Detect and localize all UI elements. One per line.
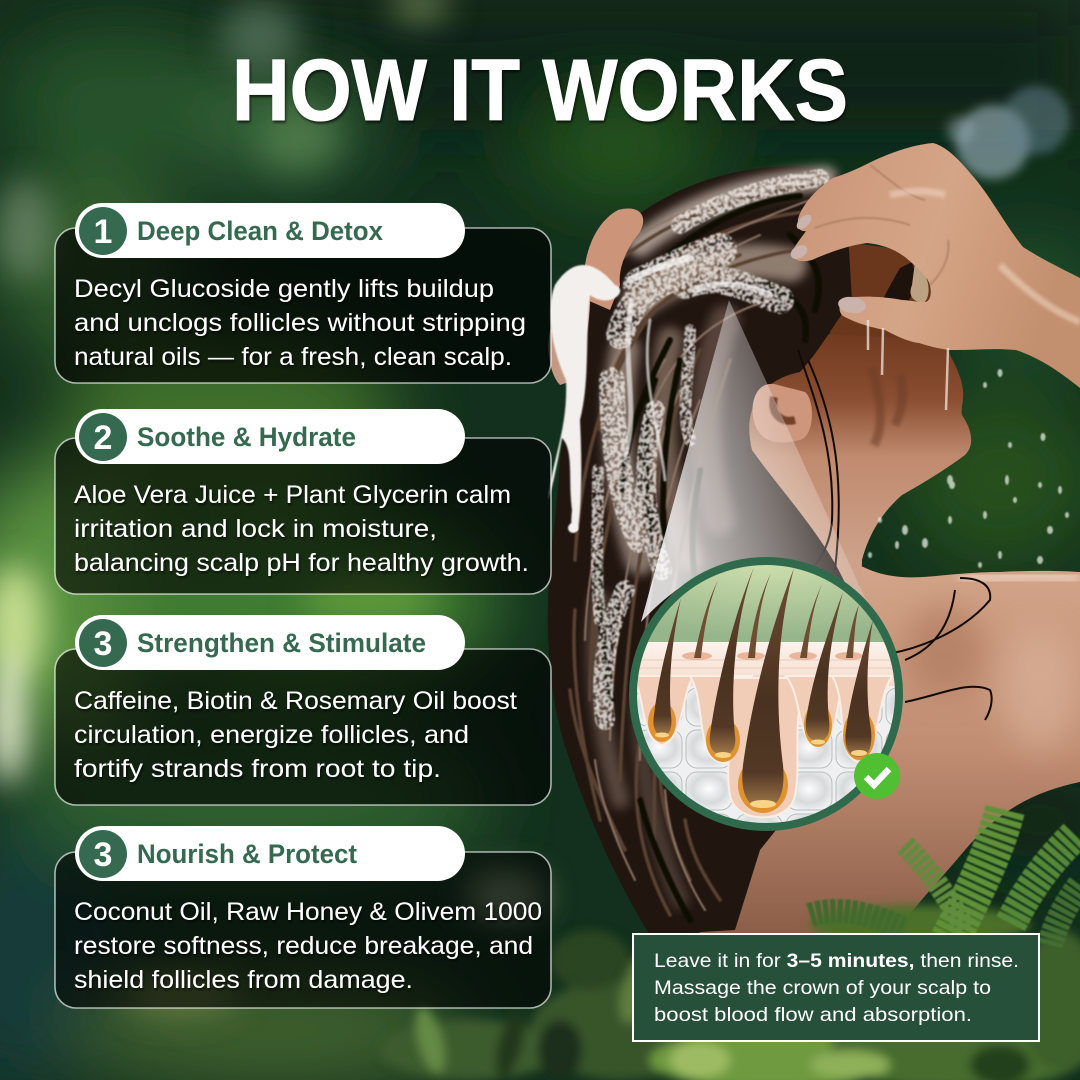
face and neck <box>740 330 971 640</box>
text: step 3 body: circulation, energize follicles, and <box>74 721 469 749</box>
small hairs <box>694 573 859 658</box>
lighter wet hair tones <box>596 178 825 900</box>
callout: usage instructions: Leave it in for 3–5 minutes, then rinse. <box>654 950 1019 972</box>
bokeh lights <box>946 86 1070 179</box>
bulb highlights <box>655 732 867 808</box>
right hand and arm <box>788 143 1080 410</box>
water droplets <box>868 369 1069 568</box>
heading: step 2: Soothe & Hydrate <box>137 422 356 452</box>
text: step 1 body: Decyl Glucoside gently lifts buildup <box>74 275 494 303</box>
text: step 2 body <box>74 481 529 577</box>
neck shadows <box>872 368 902 445</box>
text: step 1 body: natural oils — for a fresh, clean scalp. <box>74 343 512 371</box>
ferns <box>810 810 1080 945</box>
text: step 4 body: shield follicles from damage. <box>74 966 413 994</box>
callout: usage instructions: Massage the crown of your scalp to <box>654 977 991 999</box>
panel: step 2 soothe: 2 <box>94 419 112 457</box>
text: step 2 body: balancing scalp pH for healthy growth. <box>74 549 529 577</box>
photo: woman washing hair <box>380 143 1080 1080</box>
text: step 2 body: irritation and lock in moisture, <box>74 515 437 543</box>
foam <box>597 178 820 720</box>
ear <box>753 384 812 443</box>
panel: step 4 nourish: 3 <box>94 836 112 874</box>
text: step 3 body: fortify strands from root to tip. <box>74 755 441 783</box>
wet strands by the ear <box>790 350 992 720</box>
text: step 4 body: restore softness, reduce breakage, and <box>74 932 533 960</box>
panel: step 2 soothe <box>55 409 551 594</box>
magnifier cone <box>641 300 866 622</box>
gold bulbs <box>648 702 875 813</box>
callout: usage instructions <box>633 934 1039 1041</box>
panel: step 1 deep clean <box>55 203 551 383</box>
panel: step 1 deep clean: 1 <box>94 213 112 251</box>
shoulder and back <box>690 560 1080 940</box>
main hairs <box>653 567 873 808</box>
title: HOW IT WORKS <box>232 42 848 139</box>
text: step 4 body: Coconut Oil, Raw Honey & Olivem 1000 <box>74 898 542 926</box>
follicle pores <box>682 652 863 660</box>
left hand with foam <box>548 208 643 533</box>
hair tuft seen between fingers <box>880 262 929 305</box>
text: step 1 body: and unclogs follicles without stripping <box>74 309 526 337</box>
text: step 3 body: Caffeine, Biotin & Rosemary Oil boost <box>74 687 517 715</box>
text: step 2 body: Aloe Vera Juice + Plant Glycerin calm <box>74 481 511 509</box>
panel: step 3 strengthen: 3 <box>94 625 112 663</box>
callout: usage instructions: boost blood flow and absorption. <box>654 1004 972 1026</box>
forehead behind fingers <box>830 240 947 350</box>
panel: step 4 nourish <box>55 826 551 1008</box>
icon: green check badge <box>854 753 900 799</box>
text: step 3 body <box>74 687 517 783</box>
follicle illustration circle <box>630 556 910 836</box>
heading: step 4: Nourish & Protect <box>137 839 357 869</box>
sheaths <box>632 676 892 818</box>
foreground foliage <box>380 810 1080 1080</box>
water trickles <box>868 320 948 410</box>
knuckle creases <box>815 165 948 285</box>
text: step 4 body <box>74 898 542 994</box>
fingernails <box>837 295 867 315</box>
heading: step 3: Strengthen & Stimulate <box>137 628 426 658</box>
heading: step 1: Deep Clean & Detox <box>137 216 383 246</box>
circle ring <box>633 561 899 827</box>
panel: step 3 strengthen <box>55 615 551 805</box>
hair mass <box>548 166 992 935</box>
text: step 1 body <box>74 275 526 371</box>
